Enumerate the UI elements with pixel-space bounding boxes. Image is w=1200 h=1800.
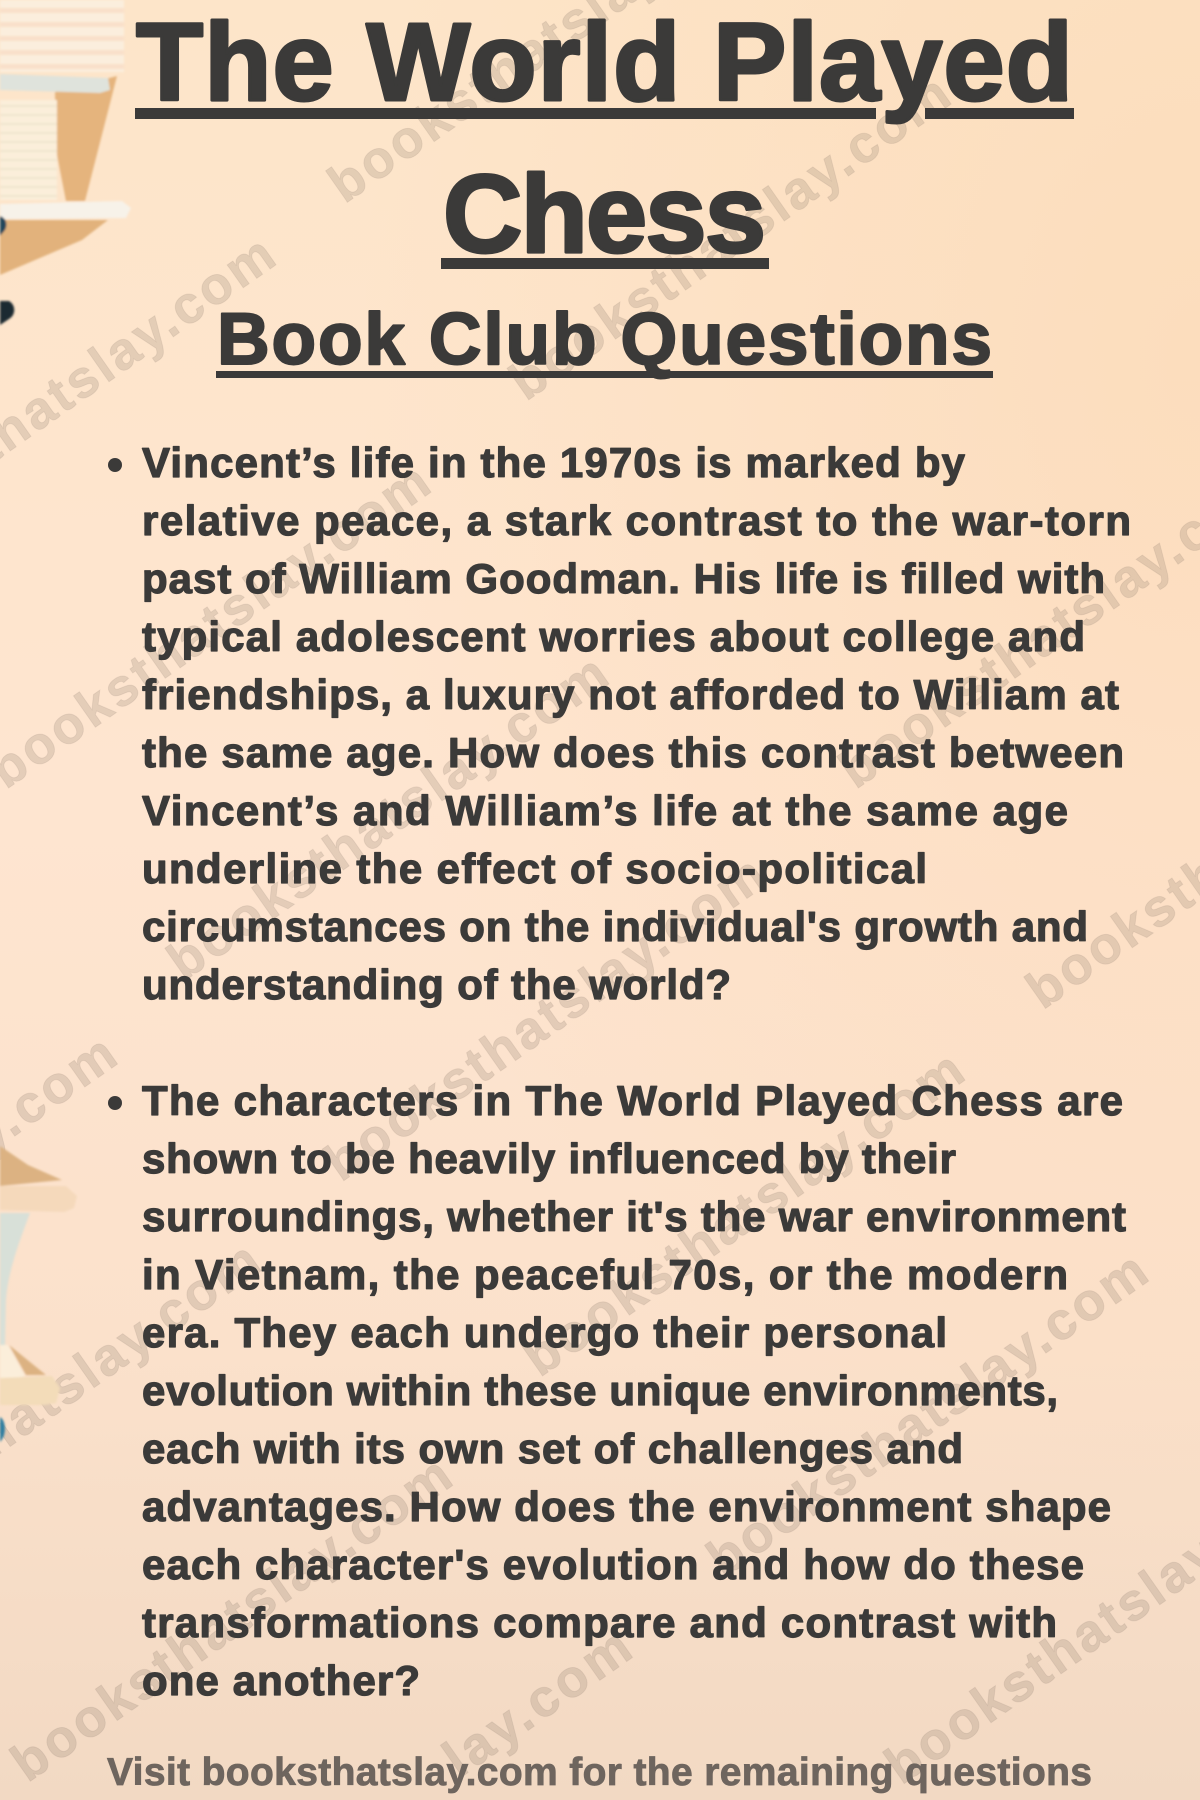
question 2: in Vietnam, the peaceful 70s, or the modern xyxy=(142,1251,1068,1298)
question 2: surroundings, whether it's the war environment xyxy=(142,1193,1126,1240)
question 1: friendships, a luxury not afforded to William at xyxy=(142,671,1119,718)
question 2: evolution within these unique environments, xyxy=(142,1367,1058,1414)
question 2: advantages. How does the environment shape xyxy=(142,1483,1111,1530)
title xyxy=(135,1,1074,276)
watermarks: booksthatslay.com xyxy=(1,1445,462,1793)
question 2 xyxy=(108,1077,1126,1704)
watermarks: booksthatslay.com xyxy=(513,1040,975,1388)
footer call to action: Visit booksthatslay.com for the remaining questions xyxy=(107,1751,1092,1794)
title: The World Played xyxy=(136,1,1073,124)
watermarks: lay.com xyxy=(432,1617,642,1789)
question 2: each with its own set of challenges and xyxy=(142,1425,963,1472)
question 1: understanding of the world? xyxy=(142,961,731,1008)
watermarks: booksthatslay.com xyxy=(314,845,776,1193)
illustration: top book stack xyxy=(0,0,131,325)
question 1: Vincent’s and William’s life at the same age xyxy=(142,787,1068,834)
title: Chess xyxy=(443,153,766,276)
question 1: relative peace, a stark contrast to the war-torn xyxy=(142,497,1131,544)
question 1 xyxy=(108,439,1131,1008)
watermarks: booksthatslay.com xyxy=(499,64,961,412)
question 2: The characters in The World Played Chess are xyxy=(142,1077,1123,1124)
question 1: typical adolescent worries about college and xyxy=(142,613,1085,660)
question 2: era. They each undergo their personal xyxy=(142,1309,947,1356)
watermarks: booksthatslay.com xyxy=(157,644,619,992)
question 1: past of William Goodman. His life is filled with xyxy=(142,555,1105,602)
illustration: lower book stack xyxy=(0,1146,77,1442)
question 2: one another? xyxy=(142,1657,420,1704)
question 1: the same age. How does this contrast between xyxy=(142,729,1124,776)
question 1: circumstances on the individual's growth and xyxy=(142,903,1088,950)
watermarks: booksthatslay.com xyxy=(696,1241,1158,1589)
question 2: transformations compare and contrast with xyxy=(142,1599,1057,1646)
question 1: Vincent’s life in the 1970s is marked by xyxy=(142,439,966,486)
question 2: each character's evolution and how do these xyxy=(142,1541,1084,1588)
subtitle: Book Club Questions xyxy=(217,299,992,380)
question 1: underline the effect of socio-political xyxy=(142,845,927,892)
question 2: shown to be heavily influenced by their xyxy=(142,1135,956,1182)
